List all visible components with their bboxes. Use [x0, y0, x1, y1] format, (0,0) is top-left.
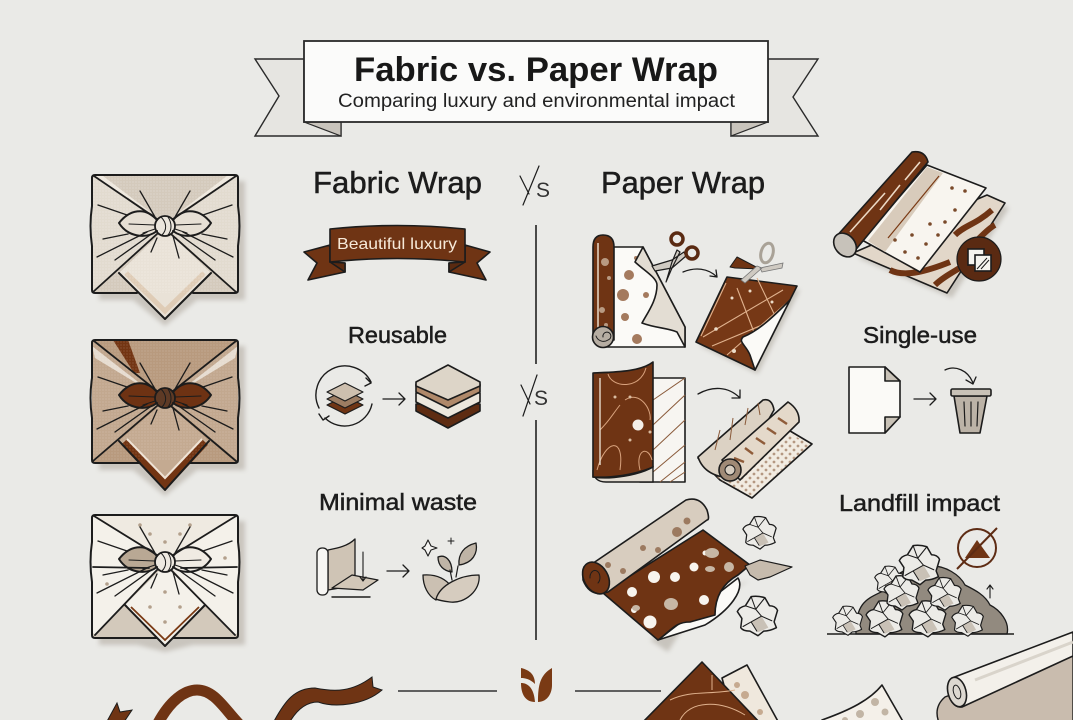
- icon: sprout: [422, 538, 479, 602]
- icon: paper sheet: [849, 367, 900, 433]
- badge: [957, 237, 1001, 281]
- icon: leaf emblem: [521, 668, 552, 702]
- fabric wrap 3: cream with dots: [90, 515, 245, 652]
- label: minimal waste: Minimal waste: [319, 489, 477, 515]
- ribbon label: Beautiful luxury: [337, 236, 457, 253]
- heading: fabric wrap: Fabric Wrap: [313, 165, 482, 200]
- icon: trash bin: [945, 368, 991, 433]
- icon: crumpled paper bottom: [737, 596, 778, 636]
- vs mark middle: [521, 375, 548, 416]
- bow: [759, 242, 775, 264]
- paper illustration: striped sheet: [593, 362, 685, 482]
- bottom divider left: [398, 690, 497, 692]
- paper illustration: patterned sheets with badge: [829, 152, 1009, 298]
- fabric wrap 2: brown: [90, 340, 245, 496]
- vs mark middle: S: [534, 387, 548, 410]
- paper illustration: wrapped gift: [696, 242, 800, 374]
- title: Fabric vs. Paper Wrap: [354, 51, 718, 89]
- icon: fabric scrap: [317, 539, 378, 597]
- title banner: [255, 41, 818, 136]
- icon: folded fabric stack: [416, 365, 480, 428]
- bottom divider right: [575, 690, 661, 692]
- subtitle: Comparing luxury and environmental impact: [338, 91, 736, 112]
- arrow: reuse: [383, 393, 405, 405]
- bottom decoration: patterned papers: [640, 662, 780, 720]
- fabric wrap 1: beige: [90, 175, 245, 326]
- ribbon: beautiful luxury: [304, 226, 490, 280]
- label: landfill impact: Landfill impact: [839, 490, 1001, 516]
- vs mark top: [520, 166, 550, 205]
- paper illustration: roll with scissors: [592, 235, 685, 348]
- icon: no landfill sign: [957, 528, 997, 569]
- right banner tail: [731, 59, 818, 136]
- bottom decoration: paper roll: [937, 632, 1073, 720]
- centre divider: [535, 225, 537, 640]
- vs mark top: S: [536, 179, 550, 202]
- paper illustration: brown polka roll: [577, 499, 792, 652]
- bottom decoration: ribbon: [105, 677, 382, 720]
- label: reusable: Reusable: [348, 322, 447, 348]
- icon: reuse cycle: [316, 366, 372, 426]
- arrow: sheet to rolls: [698, 388, 740, 398]
- arrow: single use: [914, 393, 936, 405]
- bottom decoration: dotted paper: [818, 685, 905, 720]
- arrow: cut to gift: [683, 269, 717, 277]
- left banner tail: [255, 59, 341, 136]
- paper illustration: two rolls: [698, 400, 812, 498]
- icon: crumpled paper top: [743, 516, 776, 549]
- icon: landfill pile: [827, 545, 1014, 637]
- arrow: waste: [387, 565, 409, 577]
- heading: paper wrap: Paper Wrap: [601, 165, 765, 200]
- label: single-use: Single-use: [863, 322, 977, 348]
- icon: scissors: [652, 233, 698, 282]
